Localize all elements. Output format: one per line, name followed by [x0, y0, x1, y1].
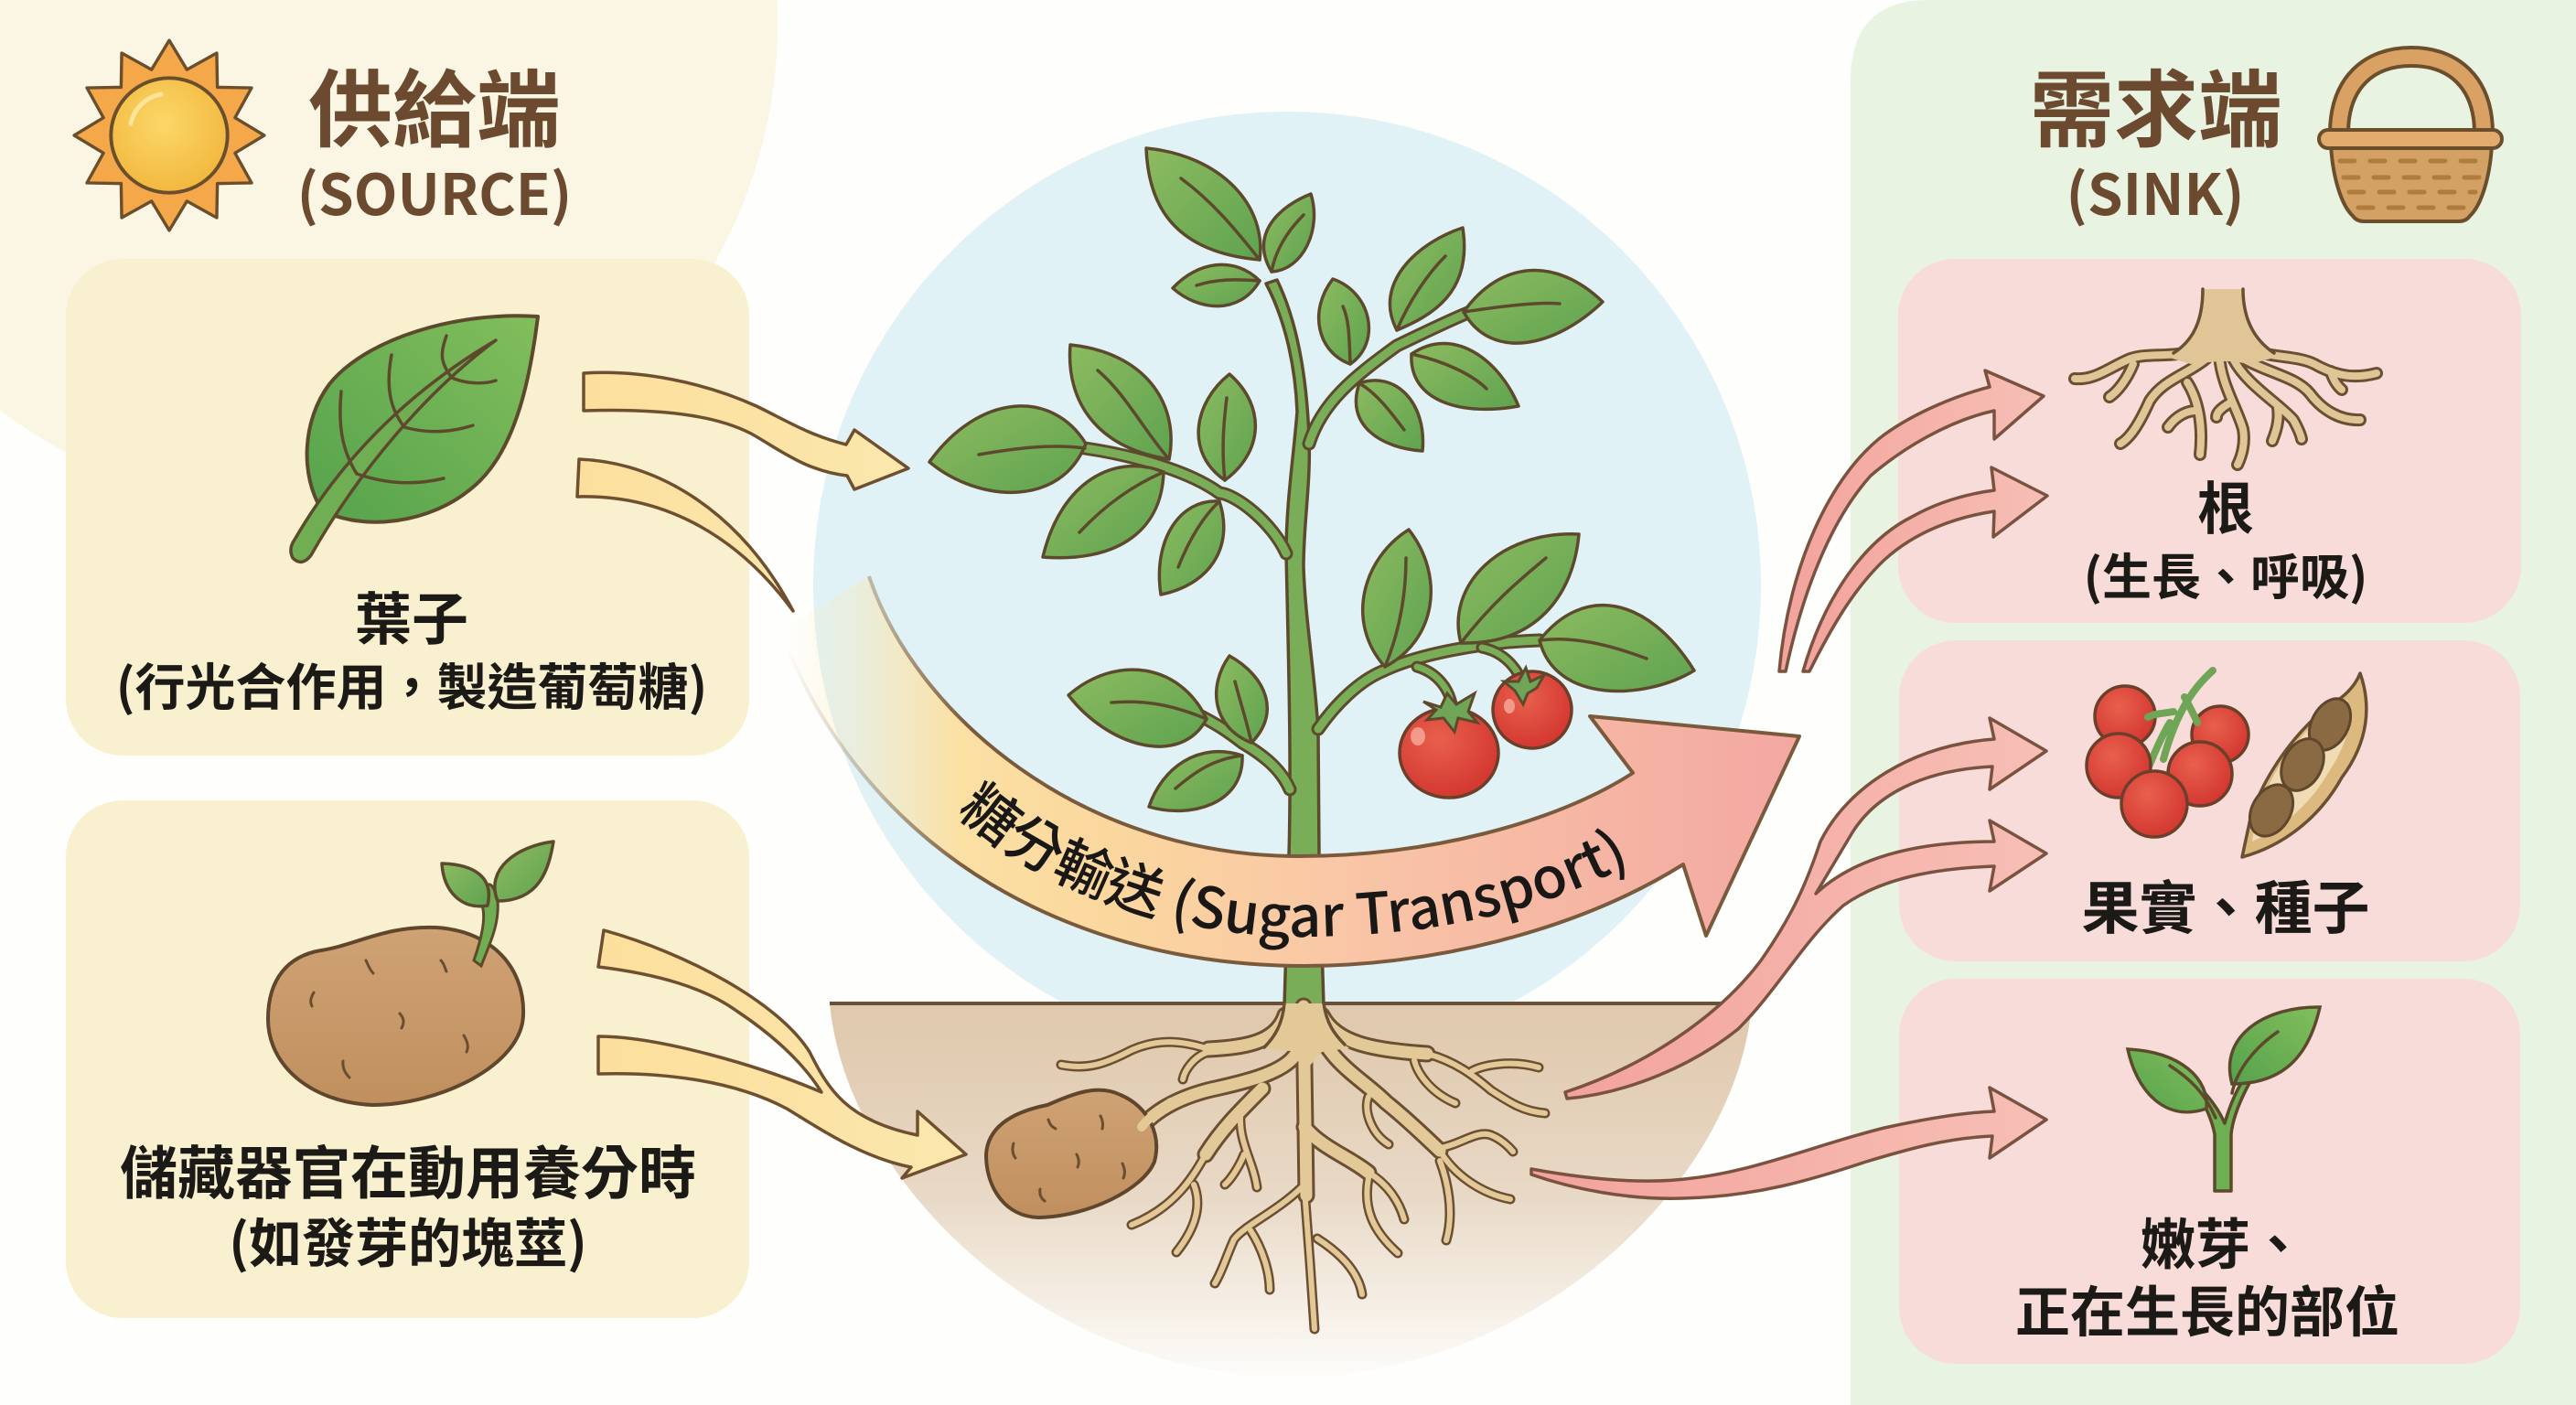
heading: sink	[2030, 43, 2282, 231]
panel: shoot sink card	[1899, 979, 2520, 1364]
arrow: soil to fruit	[1565, 718, 2046, 1099]
tomato stems	[1417, 648, 1522, 709]
arrow: main sugar transport	[793, 576, 1801, 968]
plant leaf veins	[979, 178, 1647, 788]
label: sugar transport: 糖分輸送 (Sugar Transport)	[960, 779, 1625, 949]
heading: source: (SOURCE)	[297, 149, 572, 231]
arrow: leaf to transport	[577, 459, 793, 611]
label: root: 根	[2197, 463, 2254, 545]
tomato large	[1400, 693, 1498, 798]
panel: root sink card	[1898, 259, 2521, 623]
icon: sun	[74, 40, 264, 231]
icon: berries	[2087, 670, 2249, 837]
soil line	[830, 1002, 1752, 1005]
label: shoot line 1: 嫩芽、	[2141, 1201, 2305, 1281]
label: shoot line 2: 正在生長的部位	[2015, 1269, 2399, 1348]
arrow: soil to shoot	[1531, 1088, 2046, 1198]
icon: bean pod	[2241, 673, 2367, 857]
icon: sprouting potato	[268, 842, 553, 1105]
icon: underground potato	[986, 1090, 1171, 1217]
panel: tuber source card	[66, 800, 749, 1318]
label: root detail: (生長、呼吸)	[2084, 537, 2367, 609]
arrow: transport to root upper	[1779, 370, 2044, 671]
icon: roots	[2075, 289, 2377, 465]
panel: sink background	[1851, 0, 2576, 1405]
panel: source background blob	[0, 0, 778, 509]
icon: seedling	[2128, 1007, 2320, 1191]
heading: sink: (SINK)	[2066, 149, 2245, 231]
arrow: tuber to soil potato	[598, 930, 966, 1178]
plant stem	[1266, 280, 1324, 1005]
icon: basket	[2319, 57, 2502, 221]
plant leaves	[929, 148, 1694, 810]
label: leaf detail: (行光合作用，製造葡萄糖)	[116, 647, 707, 720]
arrow: leaf to plant	[584, 372, 908, 489]
label: storage organ: 儲藏器官在動用養分時	[120, 1128, 696, 1211]
illustration: plant	[929, 148, 1694, 1005]
plant branches	[1085, 312, 1540, 789]
arrow: transport to root lower	[1803, 467, 2047, 671]
tomato small	[1493, 668, 1572, 748]
illustration: root system	[1061, 1003, 1545, 1329]
label: storage detail: (如發芽的塊莖)	[229, 1201, 587, 1278]
icon: leaf	[291, 316, 538, 562]
heading: sink: 需求端	[2030, 43, 2282, 165]
label: fruit and seed: 果實、種子	[2082, 863, 2369, 946]
label: leaf: 葉子	[355, 574, 468, 656]
panel: fruit sink card	[1899, 640, 2520, 961]
panel: sky circle	[813, 112, 1761, 1059]
heading: source	[297, 43, 572, 231]
panel: soil	[830, 1003, 1752, 1377]
heading: source: 供給端	[308, 43, 561, 165]
panel: leaf source card	[66, 259, 749, 756]
